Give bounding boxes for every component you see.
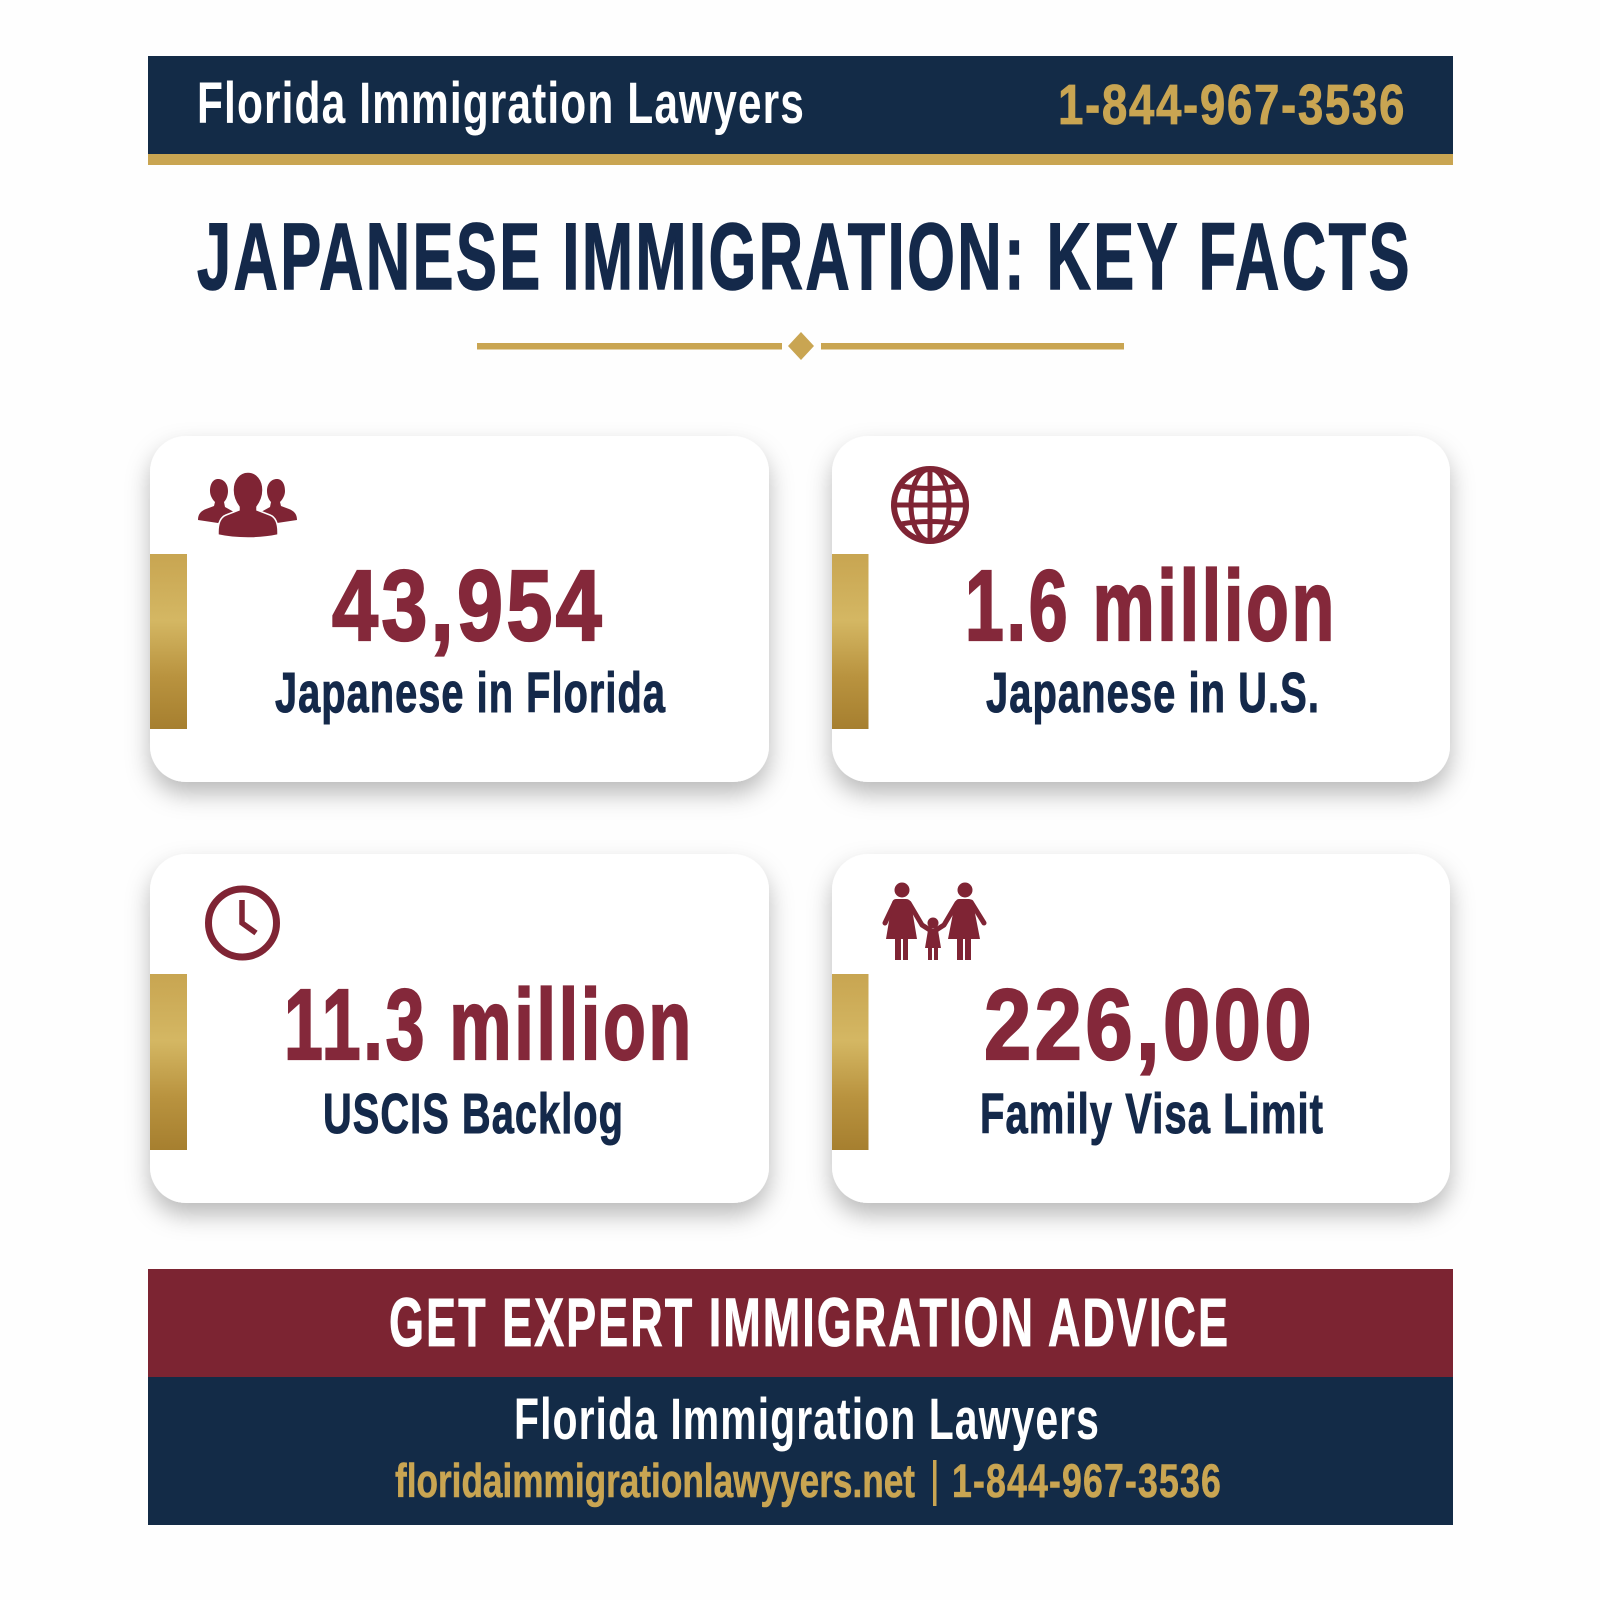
- call-to-action banner: [148, 1269, 1453, 1377]
- panel: Japanese in U.S.: [832, 436, 1450, 782]
- stat: 11.3 million: 11.3 million: [284, 969, 694, 1081]
- icon: family holding hands: [885, 882, 984, 960]
- stat: 226,000: 226,000: [984, 969, 1315, 1081]
- header firm name: Florida Immigration Lawyers: [197, 71, 805, 136]
- footer contact block: [148, 1377, 1453, 1525]
- icon: group of people: [198, 472, 297, 538]
- footer phone number: 1-844-967-3536: [952, 1454, 1222, 1507]
- title divider with diamond: [477, 332, 1124, 360]
- icon: globe: [894, 469, 966, 541]
- icon: clock: [208, 889, 276, 957]
- footer separator: [933, 1460, 936, 1506]
- panel: Family Visa Limit: [832, 854, 1450, 1203]
- panel: USCIS Backlog: [150, 854, 769, 1203]
- header bar: [148, 56, 1453, 165]
- label: USCIS Backlog: USCIS Backlog: [323, 1082, 624, 1146]
- stat: 43,954: 43,954: [332, 550, 605, 662]
- footer website: floridaimmigrationlawyyers.net: [395, 1454, 915, 1507]
- header phone number: 1-844-967-3536: [1058, 73, 1406, 137]
- label: Family Visa Limit: Family Visa Limit: [980, 1082, 1324, 1146]
- label: Japanese in Florida: Japanese in Florida: [275, 661, 666, 725]
- panel: Japanese in Florida: [150, 436, 769, 782]
- stat: 1.6 million: 1.6 million: [965, 550, 1337, 662]
- label: Japanese in U.S.: Japanese in U.S.: [986, 661, 1320, 725]
- footer firm name: Florida Immigration Lawyers: [514, 1387, 1100, 1452]
